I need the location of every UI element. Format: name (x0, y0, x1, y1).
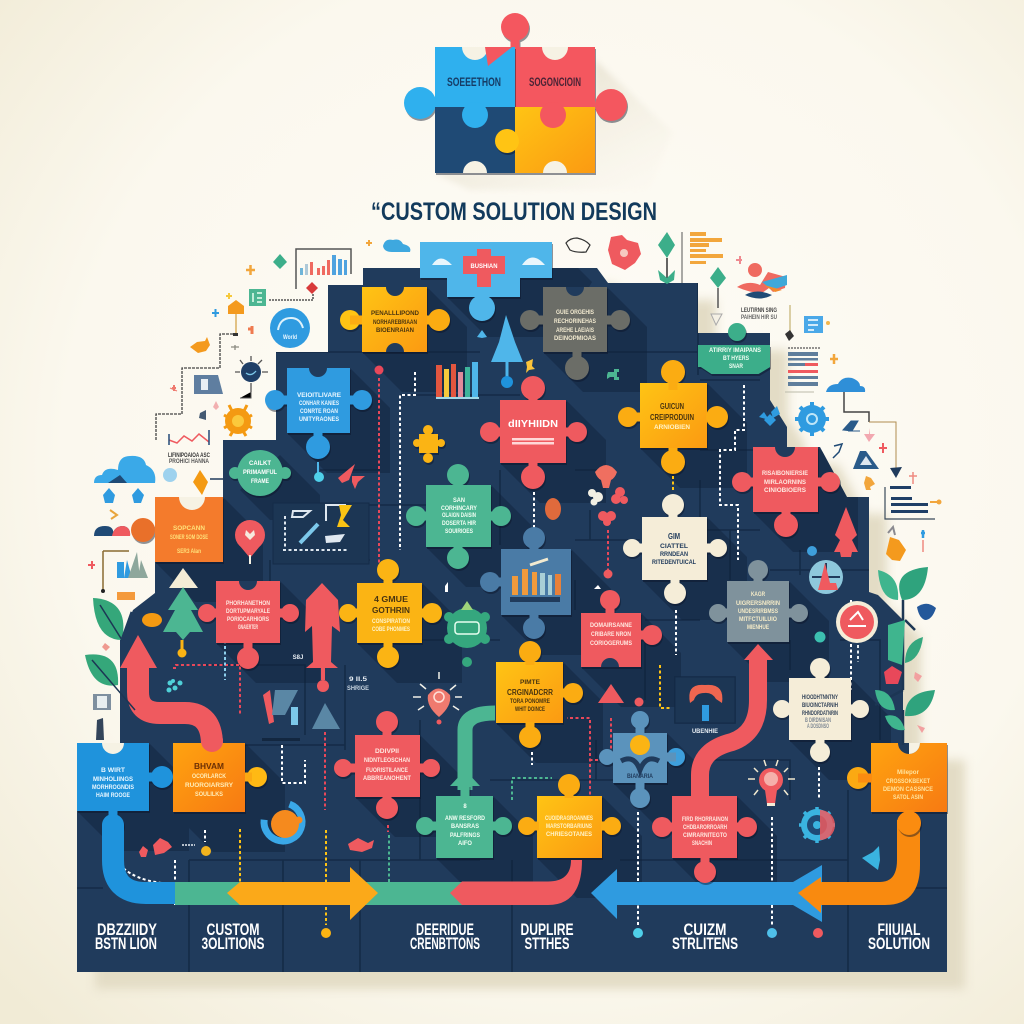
icons: left outside upper (170, 337, 268, 436)
banner clouds (432, 258, 545, 265)
piece: orange left: SER3 AIan (177, 549, 201, 555)
green arrow head (450, 770, 480, 786)
stepped path (156, 334, 236, 440)
piece: blue bottom left: B WIRT (101, 768, 125, 774)
bar chart (436, 362, 479, 399)
piece: steel gray right: MIENHUE (747, 625, 769, 631)
label: stage 2: 3OLITIONS (202, 935, 264, 953)
piece: steel blue lower: BIANARIA (627, 774, 654, 780)
piece: yellow lower: CUOIDRAGROANNES (545, 816, 593, 822)
piece: red left (198, 581, 299, 669)
icon: pencil and chart (262, 690, 300, 741)
piece: cream centre right: RITEDENTUICAL (652, 560, 696, 566)
small yellow jigsaw (413, 425, 445, 463)
connector balls (321, 928, 823, 938)
piece: blue left: CONRTE ROAN (300, 409, 338, 415)
piece: red notch: CORIOGERUMS (590, 641, 632, 647)
piece: green centre: DOSERTA HIR (442, 521, 477, 527)
hero labels: SOEEETHON (447, 75, 501, 89)
piece: orange left: SONER SOM DOSE (170, 535, 208, 541)
label: stage 4 (520, 921, 574, 953)
piece: red left: GNAIERTER (238, 625, 258, 631)
label: stage 6: SOLUTION (868, 935, 930, 953)
piece: blue bottom left: MINHOLIINGS (93, 777, 133, 783)
piece: red lower right: FIRD RHORRAINON (682, 817, 728, 823)
red pipe arrow (450, 860, 582, 905)
green badge piece: CAILKT (249, 461, 271, 467)
piece: red left: PHORHANETHON (226, 601, 270, 607)
label: stage 6 (868, 921, 930, 953)
piece: steel blue chart (480, 527, 571, 639)
green band (175, 882, 465, 905)
piece: orange left: SOPCANN (173, 526, 205, 532)
icon: orange plus (864, 476, 875, 490)
piece: gray top right: GUIE ORGEHIS (556, 310, 594, 316)
piece: cream lower right: A DOSDNSO (807, 724, 829, 730)
piece: red lower right: SNACHIN (692, 841, 712, 847)
icons: top strip (366, 232, 723, 284)
piece: blue left: UNITYRAONES (299, 417, 339, 423)
piece: gray top right (520, 287, 630, 380)
icon: green cross (607, 369, 619, 380)
label: stage 2: CUSTOM (206, 921, 260, 939)
red pipe: right arrow (700, 644, 773, 805)
blue pipe (113, 825, 175, 893)
panel: puzzle board (77, 268, 947, 972)
piece: orange bottom right: DEMON CASSNCE (883, 787, 933, 793)
icon: teal stem (314, 462, 324, 482)
piece: green centre: SOUIRIOES (445, 529, 473, 535)
label: stage 3: DEERIDUE (416, 921, 474, 939)
icons: top right outside (710, 256, 830, 341)
icons: top right outside: PAIHEIN HIR SU (741, 315, 777, 321)
hero piece: navy (435, 102, 515, 173)
piece: orange bottom left (173, 743, 267, 812)
piece: red left: PORIOCARHIORS (227, 617, 269, 623)
label: stage 1: DBZZIIDY (97, 921, 157, 939)
icon: blue bird (862, 846, 880, 870)
icon: blue tree (477, 315, 523, 388)
piece: green centre: SAN (453, 498, 465, 504)
icon: blue gear bottom (799, 807, 835, 843)
icon: compass wheel (807, 546, 843, 594)
piece: steel gray right (709, 560, 808, 642)
piece: top blue banner (420, 242, 552, 321)
icon: blue gear (795, 402, 829, 436)
icons: red splats bottom (139, 838, 374, 857)
label: stage 4: STTHES (524, 935, 570, 953)
piece: cream lower right (773, 658, 869, 762)
piece: blue left: VEIOITLIVARE (297, 393, 341, 399)
icon: small yellow star (526, 359, 535, 373)
piece: yellow right (618, 360, 728, 474)
blue arrow (591, 865, 822, 922)
piece: orange bottom right: CROSSOKBEKET (886, 779, 930, 785)
board tile lines (77, 283, 947, 972)
piece: yellow middle: PIMTE (520, 680, 540, 686)
orange pipe arrow (798, 820, 920, 913)
piece: steel gray right: UIGRERSNRRIN (736, 601, 780, 607)
piece: yellow lower: MARSTORBARIUNS (546, 824, 592, 830)
left outside icons: cloud and mid (88, 456, 223, 600)
icon: green gear badge (444, 601, 490, 667)
piece: yellow middle: TORA PONOMRE (510, 699, 550, 705)
piece: red left: DORTUPMARYALE (226, 609, 270, 615)
piece: blue left: CONHAR KANIES (299, 401, 339, 407)
icon: light bulb pin (413, 672, 462, 724)
mini bar chart (510, 559, 561, 602)
piece: steel gray right: UNDESRIRBMSS (738, 609, 778, 615)
icon: orange lamp and stars (212, 293, 253, 350)
red knob over orange piece (201, 730, 223, 752)
hero piece: blue (404, 47, 515, 128)
piece: red lower right (652, 796, 757, 883)
framed mini chart (246, 249, 351, 289)
piece: yellow top left: NORHAREBRIAAN (373, 320, 417, 326)
piece: yellow left middle: COBE PHONMES (372, 627, 410, 633)
bottom stage labels (95, 921, 930, 953)
piece: steel gray right: KAGR (751, 592, 766, 598)
dashed connector lines (110, 372, 909, 925)
piece: cream lower right: B DIRDNISAN (805, 718, 831, 724)
badge: red circle (814, 601, 878, 662)
piece: green lower: BANSRAS (451, 824, 479, 830)
label: stage 3 (410, 921, 480, 953)
piece: yellow middle (496, 641, 583, 748)
annotation text (293, 655, 369, 692)
board drop shadow (95, 285, 965, 989)
piece: steel gray right: MITFCTUILUIO (739, 617, 777, 623)
line chart icon: LIFINIPOAIOA ASC (168, 453, 211, 459)
long diagonal piece shadows (77, 242, 891, 898)
piece: red lower centre: ABBREANOHENT (363, 776, 411, 782)
icon: teal cluster (166, 679, 182, 692)
piece: orange bottom left: BHVAM (194, 762, 224, 771)
piece: yellow lower (518, 774, 621, 858)
piece: yellow right: CREIPRODUIN (650, 413, 694, 422)
piece: green lower: PALFRINGS (450, 833, 480, 839)
icon: light bulb bottom (748, 760, 795, 806)
piece: cream lower right: BIUOINCTARNIH (802, 703, 838, 709)
label: stage 5: STRLITENS (672, 935, 738, 953)
piece: gray top right: RECHORINEHAS (554, 319, 596, 325)
hero piece: yellow (495, 102, 595, 173)
green banner piece top right (698, 323, 770, 372)
icon: blue cross (759, 406, 780, 426)
piece: blue bottom left: HAIM ROOGE (96, 793, 130, 799)
icon: triangle sign (833, 444, 879, 469)
piece: yellow left middle (339, 559, 442, 668)
ball: red marker (374, 366, 384, 374)
green pipe (465, 713, 495, 790)
icon: cloud with connector (826, 378, 902, 478)
piece: gray top right: DEINOPMIOAS (554, 336, 596, 342)
piece: orange left (131, 497, 223, 562)
icon: left leaves (85, 598, 135, 710)
label: stage 1: BSTN LION (95, 935, 157, 953)
piece: green lower: ANW RESFORD (445, 816, 486, 822)
yellow arrow (227, 867, 378, 920)
green banner piece top right: ATIRRIY IMAIPANS (709, 348, 761, 354)
line chart icon (168, 430, 211, 465)
hero piece: red (501, 13, 627, 128)
piece: orange bottom left: OCORLARCK (192, 774, 227, 780)
piece: blue bottom left: MORHROGNDIS (92, 785, 134, 791)
hero red sliver (485, 47, 512, 66)
piece: red notch: CRIBARE NRON (591, 632, 631, 638)
icon: blue globe badge (270, 308, 310, 348)
piece: red lower centre (334, 711, 440, 819)
label: stage 6: FIIUIAL (878, 921, 920, 939)
panel: fan figure (675, 677, 735, 735)
left outside icons: lower (93, 643, 111, 740)
piece: green centre: OLAIGN DAISIN (442, 513, 476, 519)
panel: fan figure: UBENHIE (692, 729, 718, 735)
marker icon (621, 735, 659, 770)
icon: list document (785, 348, 838, 392)
piece: cream lower right: HIOODHTNNTNY (802, 695, 838, 701)
red pipe: left arrow (120, 635, 212, 745)
triangle marker (312, 703, 340, 729)
green badge piece (229, 450, 291, 496)
piece: green centre (406, 464, 511, 569)
piece: yellow right: ARNIOBIEN (654, 425, 690, 431)
piece: yellow right: GUICUN (660, 402, 684, 411)
piece: yellow left middle: 4 GMUE (374, 595, 409, 604)
icon: red plane (338, 464, 365, 489)
piece: cream centre right: RRNDEAN (660, 552, 688, 558)
label: stage 4: DUPLIRE (520, 921, 574, 939)
piece: cream centre right: GIM (668, 532, 680, 541)
line chart icon: PROHICI HANNA (169, 459, 210, 465)
icon: gear bottom left (259, 798, 307, 846)
icon: map pin red (235, 520, 265, 564)
piece: cream lower right: RHNDORDATNRIN (802, 711, 838, 717)
green banner piece top right: SNAR (729, 364, 744, 370)
piece: yellow top left: PENALLLIPOND (371, 311, 420, 317)
piece: orange bottom right: Milepor (897, 770, 920, 776)
piece: red right: RISAIBONIERSIE (762, 471, 808, 477)
banner red tab: BUSHIAN (470, 264, 498, 270)
icon: green leaves right cluster (875, 567, 936, 745)
icon: red arrow tree (305, 583, 340, 692)
piece: red right (732, 447, 840, 537)
piece: cream centre right (623, 494, 727, 604)
piece: orange bottom left: RUOROIARSRY (185, 783, 233, 789)
panel: chart diagram (273, 503, 369, 564)
piece: green lower: 8 (463, 804, 467, 810)
piece: blue bottom left (77, 743, 173, 836)
icon: note lines (885, 486, 942, 519)
label: stage 5 (672, 921, 738, 953)
icon: red tree (834, 507, 858, 557)
label: stage 1 (95, 921, 157, 953)
piece: yellow middle: CRGINADCRR (507, 688, 553, 697)
piece: orange bottom right (847, 743, 947, 835)
ball and small icons (445, 570, 644, 706)
piece: red right: MIRLAORNINS (764, 480, 806, 486)
label: stage 3: CRENBTTONS (410, 935, 480, 953)
icon: blue globe badge: World (283, 335, 297, 341)
piece: red lower centre: FUORISTILANCE (366, 768, 408, 774)
icon: cream-green tree (163, 568, 203, 658)
piece: yellow middle: WHIT DOINCE (515, 707, 545, 713)
hero puzzle logo: SOGONCIOIN (529, 75, 581, 89)
title: “CUSTOM SOLUTION DESIGN (371, 198, 657, 226)
green badge piece: FRAME (251, 479, 269, 485)
piece: red notch: DOMAIRSANNE (590, 623, 632, 629)
piece: red lower right: CIMRARNITEGTO (683, 833, 727, 839)
green banner piece top right: BT HYERS (723, 356, 749, 362)
piece: green lower: AIFO (458, 841, 472, 847)
icons: top right outside: LEUTIRNN SING (741, 308, 777, 314)
piece: steel blue lower (599, 711, 685, 808)
piece: gray top right: AREHE LAEIAIS (556, 328, 594, 334)
green badge piece: PRIMAMFUL (243, 470, 277, 476)
piece: red right: CINIOBIOERS (764, 488, 806, 494)
piece: yellow left middle: CONSPIRATION (372, 619, 410, 625)
label: stage 5: CUIZM (684, 921, 726, 939)
annotation text: S8J (293, 655, 303, 661)
icons: mushroom and leaves (545, 465, 628, 526)
label: stage 2 (202, 921, 264, 953)
piece: yellow top left (340, 287, 450, 352)
piece: blue left (265, 368, 372, 459)
piece: red centre: dIIYHIIDN (508, 419, 558, 430)
bottom flow arrows (113, 820, 920, 922)
piece: yellow lower: CHRIESOTANES (546, 832, 592, 838)
icon: red cross (909, 472, 917, 484)
icon: green doc and dashes (249, 282, 318, 306)
hero shadow (435, 60, 672, 190)
piece: red lower right: CHDBARORROARH (683, 825, 727, 831)
piece: yellow top left: BIOENRAIAN (376, 328, 414, 334)
icon: orange pill (142, 613, 162, 627)
piece: red lower centre: DDIVPII (375, 749, 399, 755)
piece: red notch (581, 590, 662, 667)
hero puzzle logo (404, 13, 672, 190)
piece: orange bottom left: SOULILKS (195, 792, 223, 798)
icon: orange flower right (886, 527, 925, 561)
piece: orange bottom right: SATOL ASIN (893, 795, 923, 801)
piece: red centre (480, 376, 587, 489)
piece: cream centre right: CIATTEL (660, 544, 688, 550)
piece: red lower centre: NIDNTLEOSCHAN (364, 758, 410, 764)
annotation text: SHRIGE (347, 686, 369, 692)
annotation text: 9 II.5 (349, 677, 368, 683)
piece: green lower (416, 785, 512, 858)
piece: green centre: CORHINCARY (441, 506, 477, 512)
piece: yellow left middle: GOTHRIN (372, 606, 410, 615)
